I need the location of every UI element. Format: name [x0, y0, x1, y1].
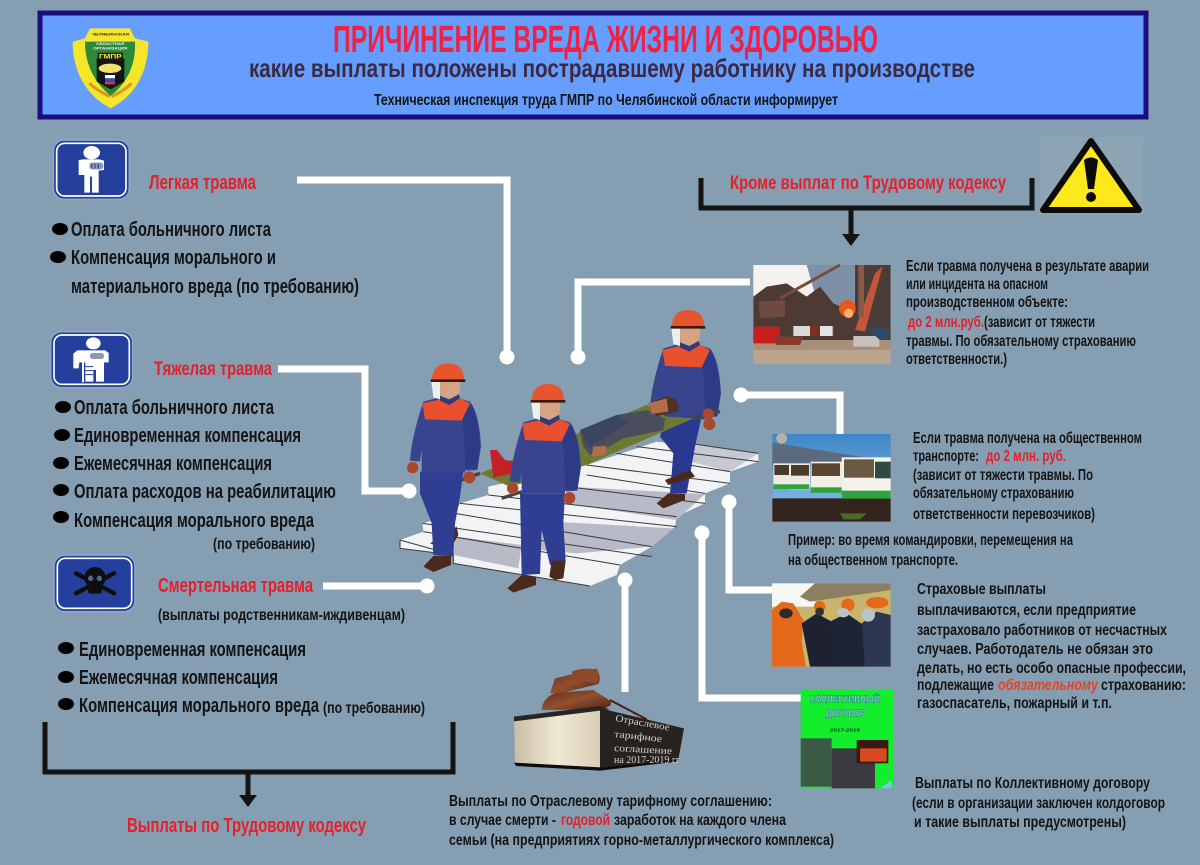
panel: public transport: [772, 430, 1142, 569]
bracket and arrow: labour code bottom: [45, 722, 453, 807]
subtitle: какие выплаты положены пострадавшему работнику на производстве: [249, 53, 975, 83]
heading: severe injury: Тяжелая травма: [154, 359, 272, 380]
source line: Техническая инспекция труда ГМПР по Челябинской области информирует: [374, 92, 838, 109]
heading: fatal injury: Смертельная травма: [158, 575, 314, 597]
line: stairs to agreement: [694, 526, 801, 698]
image: collective agreement cover: КОЛЛЕКТИВНЫЙ: [810, 694, 880, 706]
text: public transport: ответственности перевозчиков): [913, 506, 1095, 523]
text: collective agreement: [912, 775, 1165, 831]
stretcher with injured person: [457, 396, 720, 498]
text: book cover: тарифное: [614, 729, 663, 745]
worker: centre: [507, 384, 581, 593]
text: public transport: обязательному страхованию: [913, 485, 1074, 502]
text: public transport: на общественном транспорте.: [788, 552, 958, 569]
list: fatal injury: Компенсация морального вреда: [79, 695, 320, 717]
illustration: workers carrying stretcher on stairs: [400, 310, 758, 593]
bracket and arrow: [701, 178, 1032, 246]
icon: warning triangle: [1040, 137, 1143, 215]
text: hazardous site: [906, 258, 1149, 368]
icon: light injury: [53, 140, 129, 199]
connector lines: [278, 180, 840, 594]
text: hazardous site: до 2 млн.руб.: [908, 314, 984, 331]
panel: beyond labour code: [701, 137, 1143, 246]
panel: collective agreement: [801, 690, 1165, 831]
list: severe injury: Оплата расходов на реабилитацию: [74, 481, 336, 503]
icon: union emblem shield: ЧЕЛЯБИНСКАЯ: [92, 32, 129, 36]
text: collective agreement: и такие выплаты предусмотрены): [914, 814, 1126, 831]
text: insurance: выплачиваются, если предприятие: [917, 602, 1136, 619]
worker: left: [407, 363, 481, 572]
panel: fatal injury: [54, 555, 425, 717]
text: insurance: обязательному: [998, 677, 1099, 694]
label: beyond labour code: Кроме выплат по Трудовому кодексу: [730, 173, 1006, 194]
text: book cover: [614, 713, 680, 766]
list: fatal injury: (по требованию): [323, 700, 425, 717]
icon: union emblem shield: ГМПР: [99, 54, 122, 60]
image: collective agreement cover: [801, 690, 893, 788]
panel: accident at hazardous site: [753, 258, 1149, 368]
list: fatal injury: [58, 639, 425, 717]
icon: severe injury: [51, 332, 133, 388]
heading: light injury: Легкая травма: [149, 172, 257, 194]
text: sectoral agreement: Выплаты по Отраслевому тарифному соглашению:: [449, 793, 772, 810]
text: hazardous site: или инцидента на опасном: [906, 276, 1048, 293]
label: labour code payments: Выплаты по Трудовому кодексу: [127, 815, 367, 837]
text: insurance: подлежащие: [917, 677, 994, 694]
text: book cover: соглашение: [614, 743, 673, 757]
note: dependants: (выплаты родственникам-иждивенцам): [158, 607, 405, 624]
text: public transport: транспорте:: [913, 448, 979, 465]
panel: sectoral agreement: [449, 668, 834, 849]
list: light injury: [50, 219, 359, 298]
text: insurance: случаев. Работодатель не обязан это: [917, 641, 1153, 658]
text: book cover: на 2017-2019 гг: [614, 755, 680, 766]
text: public transport: (зависит от тяжести травмы. По: [913, 467, 1093, 484]
list: severe injury: (по требованию): [213, 536, 315, 553]
panel: header: [40, 13, 1146, 117]
icon: skull and crossbones: [54, 555, 135, 612]
list: fatal injury: Ежемесячная компенсация: [79, 667, 278, 689]
list: light injury: материального вреда (по требованию): [71, 276, 359, 298]
panel: light injury: [50, 140, 359, 298]
worker: rear right: [647, 310, 721, 508]
panel: severe injury: [51, 332, 336, 553]
text: sectoral agreement: [449, 793, 834, 849]
title: ПРИЧИНЕНИЕ ВРЕДА ЖИЗНИ И ЗДОРОВЬЮ: [333, 19, 878, 61]
text: sectoral agreement: в случае смерти -: [449, 812, 556, 829]
text: insurance: газоспасатель, пожарный и т.п.: [917, 695, 1112, 712]
list: severe injury: Ежемесячная компенсация: [74, 453, 272, 475]
text: hazardous site: производственном объекте:: [906, 294, 1068, 311]
text: sectoral agreement: семьи (на предприятиях горно-металлургического комплекса): [449, 832, 834, 849]
list: severe injury: Компенсация морального вреда: [74, 510, 315, 532]
panel: insurance payments: [772, 581, 1186, 712]
text: insurance: Страховые выплаты: [917, 581, 1046, 598]
text: hazardous site: ответственности.): [906, 351, 1007, 368]
text: public transport: [788, 430, 1142, 569]
text: book cover: Отраслевое: [614, 713, 671, 734]
icon: union emblem shield: ОРГАНИЗАЦИЯ: [93, 46, 128, 50]
line: stairs to gavel: [618, 572, 632, 692]
photo: rescue workers: [772, 583, 891, 667]
list: severe injury: Единовременная компенсация: [74, 425, 301, 447]
list: light injury: Оплата больничного листа: [71, 219, 272, 241]
icon: union emblem shield: [73, 28, 148, 108]
icon: union emblem shield: ОБЛАСТНАЯ: [96, 42, 125, 46]
stairs: [400, 440, 758, 586]
photo: industrial fire: [753, 265, 891, 364]
text: sectoral agreement: заработок на каждого члена: [614, 812, 786, 829]
image: collective agreement cover: 2017-2019: [830, 728, 860, 734]
text: sectoral agreement: годовой: [561, 812, 610, 829]
image: collective agreement cover: ДОГОВОР: [826, 709, 866, 720]
list: severe injury: [53, 397, 336, 553]
text: insurance: [917, 581, 1186, 712]
text: hazardous site: (зависит от тяжести: [984, 314, 1095, 331]
text: public transport: Пример: во время командировки, перемещения на: [788, 532, 1073, 549]
list: light injury: Компенсация морального и: [71, 247, 276, 269]
text: public transport: до 2 млн. руб.: [986, 448, 1066, 465]
image: gavel on book: [514, 668, 684, 771]
photo: buses: [772, 433, 891, 522]
list: severe injury: Оплата больничного листа: [74, 397, 275, 419]
list: fatal injury: Единовременная компенсация: [79, 639, 306, 661]
